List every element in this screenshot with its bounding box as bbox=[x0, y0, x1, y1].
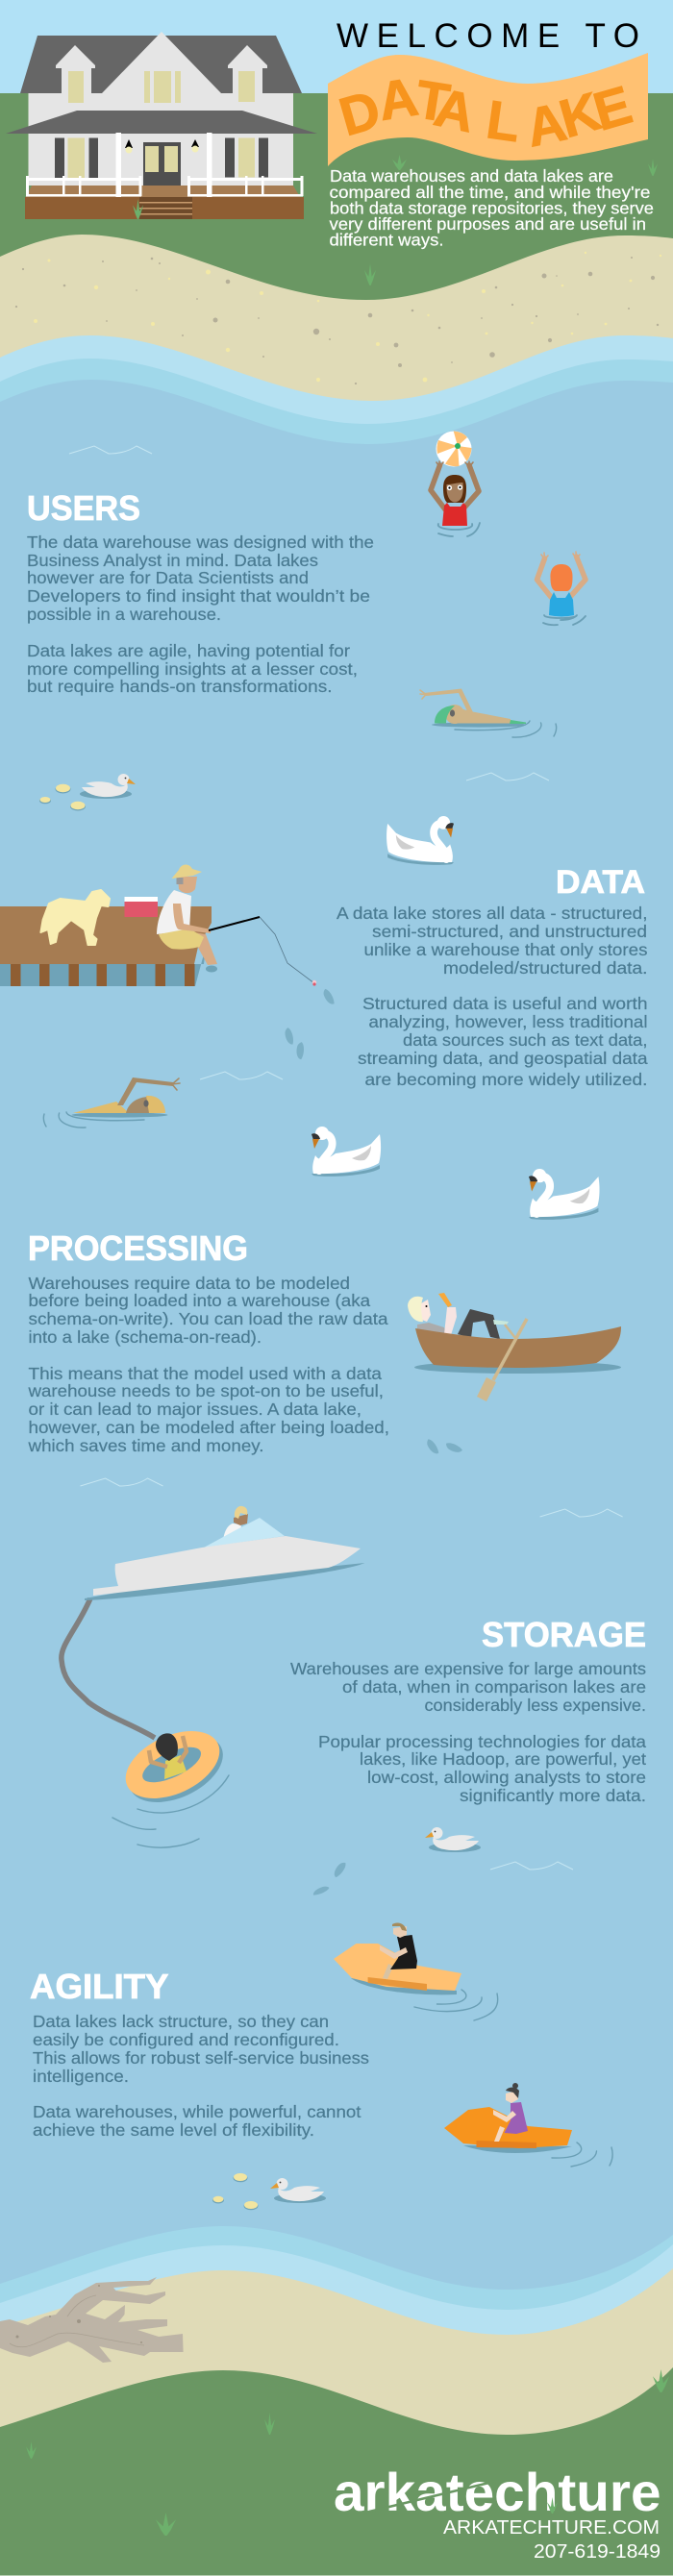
banner: data lake bbox=[328, 53, 648, 166]
arm bbox=[173, 904, 211, 933]
water shadow bbox=[85, 1563, 365, 1600]
icon: cooler bbox=[125, 897, 158, 917]
duck with ducklings bbox=[212, 2173, 326, 2210]
swim cap bbox=[146, 1096, 165, 1113]
windshield bbox=[204, 1518, 285, 1548]
rider arm bbox=[493, 2110, 516, 2122]
swimsuit bbox=[549, 592, 574, 617]
swimmer: green cap front crawl bbox=[420, 688, 557, 737]
text: processing body: before being loaded into a warehouse (aka bbox=[29, 1291, 370, 1310]
text: storage body: considerably less expensive. bbox=[425, 1696, 646, 1715]
intro text: very different purposes and are useful in bbox=[329, 214, 646, 234]
speedboat towing tube bbox=[62, 1506, 364, 1738]
hull bbox=[444, 2107, 572, 2148]
duck bbox=[270, 2178, 326, 2203]
text: agility body: Data warehouses, while powerful, cannot bbox=[33, 2102, 361, 2121]
water shadow bbox=[414, 1361, 621, 1374]
logo and contact bbox=[334, 2462, 661, 2563]
intro text: Data warehouses and data lakes are bbox=[330, 166, 613, 186]
head bbox=[178, 877, 197, 893]
panel: users bbox=[27, 488, 374, 696]
text: processing body: or it can lead to major issues. A data lake, bbox=[29, 1399, 361, 1419]
intro text bbox=[329, 166, 654, 250]
banner: data lake: A bbox=[430, 76, 480, 143]
body bbox=[417, 1323, 446, 1334]
fish shadows bbox=[284, 987, 463, 1896]
goggles bbox=[143, 1100, 149, 1107]
panel: storage bbox=[290, 1615, 646, 1805]
text: storage body: of data, when in comparison lakes are bbox=[342, 1677, 646, 1697]
text: data body: A data lake stores all data - structured, bbox=[336, 904, 648, 923]
fisherman bbox=[157, 865, 316, 986]
text: users body: but require hands-on transformations. bbox=[27, 677, 333, 696]
panel: processing bbox=[27, 1228, 389, 1455]
text: processing body: into a lake (schema-on-read). bbox=[29, 1327, 262, 1347]
face bbox=[446, 483, 463, 502]
porch roof bbox=[6, 111, 317, 134]
ripples bbox=[414, 1990, 498, 2020]
rider arm bbox=[380, 1945, 408, 1959]
heading: storage: STORAGE bbox=[482, 1615, 646, 1654]
banner: data lake: L bbox=[483, 88, 524, 153]
foundation bbox=[25, 197, 304, 219]
intro text: different ways. bbox=[329, 231, 444, 250]
goggles bbox=[450, 709, 455, 717]
right dormer bbox=[228, 45, 267, 93]
text: users body: The data warehouse was designed with the bbox=[27, 533, 374, 552]
text: storage body: Popular processing technologies for data bbox=[318, 1732, 646, 1751]
steps bbox=[139, 186, 192, 219]
hair bbox=[408, 1297, 423, 1322]
tube hole bbox=[137, 1740, 206, 1790]
heading: processing: PROCESSING bbox=[28, 1228, 248, 1268]
rider leg bbox=[383, 1964, 393, 1979]
trunks bbox=[510, 720, 526, 724]
text: storage body: significantly more data. bbox=[460, 1786, 646, 1805]
legs bbox=[176, 929, 217, 965]
text: users body: possible in a warehouse. bbox=[27, 605, 221, 624]
text: storage body: Warehouses are expensive for large amounts bbox=[290, 1659, 646, 1678]
porch lamps bbox=[125, 139, 199, 154]
water shadow bbox=[432, 722, 526, 728]
swan bbox=[312, 1127, 381, 1177]
swan bbox=[529, 1169, 600, 1220]
text: storage body: lakes, like Hadoop, are powerful, yet bbox=[360, 1749, 646, 1769]
tube rider bbox=[112, 1718, 234, 1847]
banner: data lake: T bbox=[411, 68, 454, 134]
background: lake bbox=[0, 380, 673, 2307]
fishing rod bbox=[209, 917, 260, 930]
tube bbox=[115, 1718, 230, 1812]
banner: data lake: A bbox=[374, 65, 422, 132]
background: bottom grass bbox=[0, 2367, 673, 2576]
jet ski: purple shirt rider bbox=[444, 2083, 612, 2167]
title: welcome to: WELCOME TO bbox=[336, 17, 639, 55]
banner: data lake: D bbox=[333, 78, 386, 147]
background: shore water light bbox=[0, 335, 673, 481]
ducklings bbox=[39, 784, 86, 811]
dock supports bbox=[0, 947, 206, 986]
bobber bbox=[312, 980, 316, 986]
ripples bbox=[438, 523, 480, 536]
hair bbox=[550, 564, 573, 591]
head bbox=[445, 705, 464, 724]
foot shadow bbox=[206, 965, 217, 973]
rider arms bbox=[149, 1736, 187, 1767]
text: agility body bbox=[33, 2012, 369, 2140]
oar bbox=[477, 1319, 527, 1401]
background: bottom water mid bbox=[0, 2226, 673, 2576]
upper roof bbox=[20, 36, 302, 93]
text: users body: Data lakes are agile, having potential for bbox=[27, 641, 350, 660]
face bbox=[419, 1300, 431, 1322]
text: users body: more compelling insights at a lesser cost, bbox=[27, 659, 358, 679]
heading: agility: AGILITY bbox=[30, 1967, 169, 2006]
left dormer bbox=[56, 45, 95, 93]
head bbox=[126, 1097, 149, 1113]
side band bbox=[368, 1977, 427, 1991]
background: sky bbox=[0, 0, 673, 93]
duck bbox=[425, 1827, 481, 1852]
text: processing body: warehouse needs to be spot-on to be useful, bbox=[27, 1381, 384, 1400]
upper windows bbox=[68, 71, 255, 103]
reader legs bbox=[458, 1309, 500, 1339]
hat bbox=[171, 865, 202, 879]
ripples bbox=[112, 1775, 229, 1847]
shirt bbox=[157, 890, 191, 934]
driver bbox=[223, 1506, 248, 1541]
text: data body: data sources such as text data, bbox=[403, 1030, 648, 1050]
side band bbox=[477, 2141, 536, 2148]
intro text: compared all the time, and while they're bbox=[329, 183, 650, 202]
sand speckles bbox=[15, 252, 661, 384]
ripples bbox=[455, 721, 557, 737]
shorts bbox=[159, 929, 204, 950]
dock with dog and fisherman bbox=[0, 865, 316, 986]
hair bbox=[443, 475, 466, 503]
text: processing body: which saves time and money. bbox=[27, 1436, 263, 1455]
raised arm bbox=[117, 1077, 173, 1105]
icon: grass tufts (top) bbox=[133, 155, 658, 285]
text: agility body: Data lakes lack structure, so they can bbox=[33, 2012, 329, 2031]
text: storage body: low-cost, allowing analysts to store bbox=[367, 1768, 646, 1787]
text: agility body: achieve the same level of flexibility. bbox=[33, 2120, 314, 2140]
ripples bbox=[552, 2143, 612, 2167]
tube shadow bbox=[118, 1721, 234, 1816]
ducklings bbox=[212, 2173, 258, 2210]
arms bbox=[536, 557, 586, 597]
water shadow bbox=[463, 2145, 572, 2153]
background: shore water mid bbox=[0, 359, 673, 500]
heading: data: DATA bbox=[556, 864, 645, 901]
swim cap bbox=[435, 706, 455, 723]
duck bbox=[80, 774, 136, 799]
body bbox=[451, 706, 511, 723]
front door bbox=[143, 142, 181, 186]
shoe bbox=[493, 1320, 509, 1325]
rider hair bbox=[156, 1733, 178, 1761]
water shadow bbox=[71, 1112, 167, 1118]
swimmer: woman in red with raised arms bbox=[431, 461, 480, 536]
ripples bbox=[43, 1112, 144, 1127]
text: processing body: Warehouses require data to be modeled bbox=[29, 1274, 350, 1293]
ripples bbox=[543, 615, 586, 625]
logo: arkatechture: arkatechture bbox=[334, 2462, 661, 2522]
rider leg bbox=[494, 2126, 505, 2142]
website: ARKATECHTURE.COM bbox=[443, 2517, 660, 2539]
jet ski: black shirt rider bbox=[334, 1922, 498, 2020]
text: storage body bbox=[290, 1659, 646, 1805]
banner: data lake: E bbox=[586, 74, 638, 142]
house bbox=[6, 32, 317, 219]
swan bbox=[386, 816, 454, 865]
text: processing body: schema-on-write). You can load the raw data bbox=[29, 1309, 388, 1328]
rowboat with reader bbox=[408, 1293, 621, 1401]
text: data body: unlike a warehouse that only stores bbox=[363, 940, 648, 959]
text: users body: Developers to find insight that wouldn’t be bbox=[27, 586, 370, 606]
text: data body: modeled/structured data. bbox=[443, 958, 648, 978]
phone number: 207-619-1849 bbox=[534, 2541, 661, 2563]
dock deck bbox=[0, 906, 212, 964]
background: bottom water light bbox=[0, 2244, 673, 2576]
text: data body: analyzing, however, less traditional bbox=[369, 1012, 648, 1031]
background: top grass bbox=[0, 93, 673, 324]
rider shirt and shorts bbox=[390, 1935, 417, 1969]
text: users body bbox=[27, 533, 374, 696]
posts and railing bbox=[26, 133, 304, 197]
banner: data lake: K bbox=[553, 80, 607, 149]
text: processing body: however, can be modeled after being loaded, bbox=[29, 1418, 389, 1437]
text: data body: Structured data is useful and worth bbox=[362, 994, 648, 1013]
icon: grass tufts (bottom) bbox=[26, 2369, 669, 2536]
hull bbox=[415, 1326, 621, 1368]
driftwood bbox=[0, 2277, 184, 2363]
water shadow bbox=[351, 1978, 457, 1994]
hull bbox=[93, 1536, 361, 1596]
text: users body: however are for Data Scientists and bbox=[27, 568, 309, 587]
beach ball bbox=[436, 431, 471, 467]
lower windows and shutters bbox=[55, 138, 268, 179]
text: data body: are becoming more widely utilized. bbox=[365, 1070, 648, 1089]
swimmer: woman in blue from behind bbox=[536, 552, 586, 625]
arm bbox=[444, 1307, 457, 1335]
duck with ducklings bbox=[39, 774, 136, 811]
intro text: both data storage repositories, they serve bbox=[330, 198, 654, 217]
hull bbox=[334, 1944, 461, 1991]
rider head bbox=[506, 2083, 519, 2103]
text: agility body: intelligence. bbox=[33, 2067, 129, 2086]
panel: data bbox=[336, 864, 648, 1089]
rider head bbox=[392, 1922, 407, 1938]
heading: users: USERS bbox=[27, 488, 140, 528]
rider body bbox=[164, 1755, 187, 1779]
panel: agility bbox=[30, 1967, 369, 2140]
background: top sand bbox=[0, 235, 673, 433]
porch floor bbox=[26, 186, 300, 197]
fishing line bbox=[260, 917, 314, 983]
wave squiggles bbox=[69, 446, 623, 1870]
text: users body: Business Analyst in mind. Data lakes bbox=[27, 551, 318, 570]
body bbox=[73, 1102, 129, 1113]
text: agility body: This allows for robust self-service business bbox=[33, 2048, 369, 2068]
arms bbox=[431, 465, 479, 509]
swimsuit bbox=[442, 503, 467, 526]
banner: data lake: A bbox=[521, 90, 571, 158]
text: processing body bbox=[27, 1274, 389, 1455]
background: bottom sand bbox=[0, 2268, 673, 2576]
text: processing body: This means that the model used with a data bbox=[29, 1364, 382, 1383]
raised arm bbox=[424, 688, 473, 713]
text: data body: semi-structured, and unstructured bbox=[372, 922, 647, 941]
tow rope bbox=[62, 1598, 155, 1738]
rider dress bbox=[504, 2102, 528, 2134]
text: data body bbox=[336, 904, 648, 1089]
icon: dog bbox=[40, 890, 110, 945]
centre gable bbox=[102, 32, 221, 93]
walls bbox=[29, 93, 293, 186]
swimmer: orange cap front crawl bbox=[43, 1077, 180, 1127]
text: data body: streaming data, and geospatial data bbox=[358, 1049, 648, 1068]
book bbox=[438, 1293, 452, 1307]
text: agility body: easily be configured and reconfigured. bbox=[33, 2030, 339, 2049]
